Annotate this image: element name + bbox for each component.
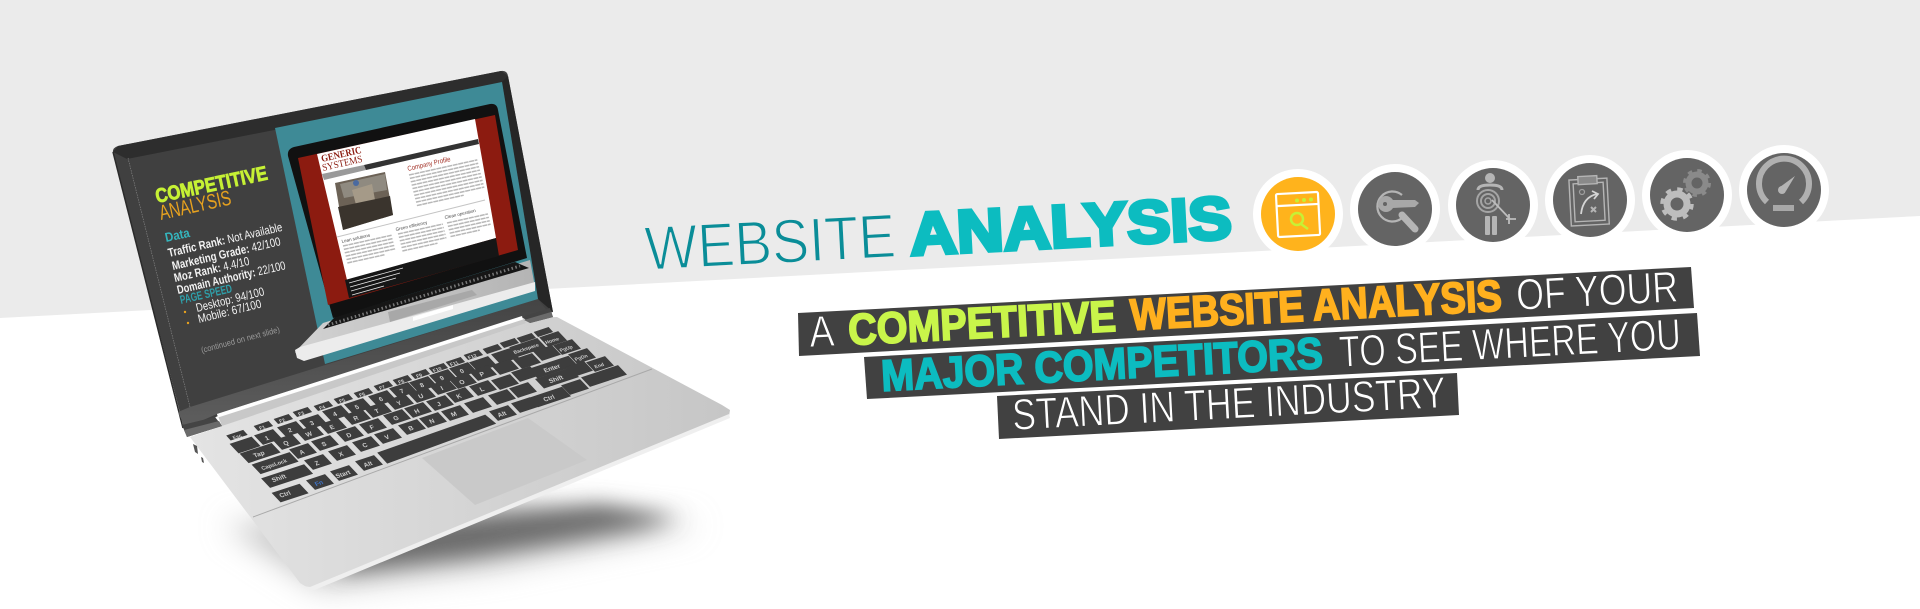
icon: gears xyxy=(1642,150,1732,240)
key labels: Enter xyxy=(543,363,562,374)
background grey band xyxy=(0,0,1920,318)
key labels: Q xyxy=(282,440,290,447)
banner: line 1: OF YOUR xyxy=(1515,263,1679,320)
slide data list: Traffic Rank: Not Available xyxy=(167,220,284,260)
key labels: H xyxy=(413,408,422,415)
mini body copy xyxy=(343,160,491,263)
home key row xyxy=(252,348,596,474)
key labels: Home xyxy=(544,336,561,346)
key labels: PgDn xyxy=(574,354,589,363)
banner: line 3: STAND IN THE INDUSTRY xyxy=(1011,368,1447,440)
slide data list: PAGE SPEED xyxy=(179,281,234,307)
key labels: Ctrl xyxy=(542,394,557,403)
key labels: F10 xyxy=(432,366,443,374)
shift key row xyxy=(261,356,614,488)
key labels: PgUp xyxy=(559,345,574,354)
key labels: Y xyxy=(395,400,404,407)
key labels: E xyxy=(328,424,337,431)
mini website: Company Profile xyxy=(407,156,451,173)
laptop ports xyxy=(193,444,204,463)
key labels: Alt xyxy=(496,410,509,419)
banner: line 1: COMPETITIVE xyxy=(847,292,1117,355)
slide data list xyxy=(164,220,287,355)
icon: speedometer xyxy=(1739,145,1829,235)
key labels: 1 xyxy=(264,435,271,442)
key labels: 5 xyxy=(354,404,361,411)
mini laptop lid xyxy=(288,104,527,318)
key labels: Tap xyxy=(252,450,266,459)
key labels: O xyxy=(458,379,466,386)
number key row xyxy=(230,331,567,453)
slide data list: (continued on next slide) xyxy=(200,324,281,355)
key labels: X xyxy=(337,451,346,458)
key labels: Fn xyxy=(314,479,325,488)
key labels: 6 xyxy=(378,396,385,403)
key labels: J xyxy=(436,401,443,408)
key labels: 7 xyxy=(399,388,406,395)
key labels: Shift xyxy=(271,473,289,484)
title xyxy=(643,184,1233,284)
key labels: G xyxy=(392,415,400,422)
slide data list: Data xyxy=(164,225,192,245)
key labels: R xyxy=(352,415,361,422)
laptop hinges xyxy=(182,308,553,437)
key labels: 8 xyxy=(419,382,426,389)
key labels: C xyxy=(361,442,370,449)
key labels: F12 xyxy=(467,353,478,361)
lid lower bezel xyxy=(178,299,548,428)
icon: browser search xyxy=(1253,169,1343,259)
key labels xyxy=(232,336,605,499)
slide data list: Moz Rank: 4.4/10 xyxy=(173,254,251,285)
mini laptop xyxy=(288,104,535,361)
icon: strategy clipboard xyxy=(1545,155,1635,245)
key labels: Ctrl xyxy=(278,490,293,499)
key labels: V xyxy=(383,434,392,441)
mini photo xyxy=(335,172,393,230)
key labels: N xyxy=(428,418,437,425)
key labels: U xyxy=(417,393,426,400)
key labels: Alt xyxy=(362,460,375,469)
key labels: F6 xyxy=(358,392,367,399)
banner: line 2: MAJOR COMPETITORS xyxy=(880,329,1324,401)
key labels: M xyxy=(450,411,459,419)
title: ANALYSIS xyxy=(908,184,1233,268)
key labels: End xyxy=(594,362,605,370)
QWERTY key row xyxy=(240,339,581,463)
mini logo: GENERIC xyxy=(320,145,363,165)
banner: line 1: A xyxy=(808,307,836,357)
mini website: Clean operation xyxy=(444,208,477,220)
mini website xyxy=(298,115,518,305)
laptop shadow xyxy=(225,505,700,588)
key labels: W xyxy=(305,430,315,439)
key labels: F9 xyxy=(415,373,424,380)
key labels: 4 xyxy=(332,411,339,418)
banner: line 1 xyxy=(798,263,1694,357)
key labels: F7 xyxy=(378,385,387,392)
key labels: Z xyxy=(314,460,321,467)
key labels: T xyxy=(374,408,381,415)
icon: keyword search xyxy=(1350,164,1440,254)
mini website: SYSTEMS xyxy=(321,154,364,174)
slide data list: Marketing Grade: 42/100 xyxy=(171,234,282,273)
key labels: K xyxy=(455,393,464,400)
keyboard xyxy=(226,327,627,502)
mini laptop base xyxy=(295,260,535,361)
mini website: Lean solutions xyxy=(341,232,371,244)
key labels: F xyxy=(369,424,376,431)
bottom key row xyxy=(272,365,627,502)
banner: line 1: WEBSITE ANALYSIS xyxy=(1129,272,1503,340)
key labels: D xyxy=(345,432,354,439)
key labels: F8 xyxy=(397,379,406,386)
trackpad xyxy=(422,418,587,505)
key labels: Shift xyxy=(548,374,566,385)
laptop base xyxy=(190,317,730,591)
slide data list: Mobile: 67/100 xyxy=(196,297,263,326)
key labels: F5 xyxy=(338,398,347,405)
key labels: A xyxy=(298,449,307,456)
key labels: I xyxy=(440,385,445,392)
key labels: S xyxy=(320,441,329,448)
key labels: B xyxy=(407,425,416,432)
key labels: P xyxy=(478,371,487,378)
key labels: F1 xyxy=(258,425,267,432)
key labels: Esc xyxy=(232,433,243,441)
slide heading xyxy=(153,163,270,225)
slide data list: Desktop: 94/100 xyxy=(194,284,266,315)
mini website: Green efficiency xyxy=(395,220,429,232)
slide heading: ANALYSIS xyxy=(157,187,233,225)
key labels: F4 xyxy=(318,405,327,412)
key labels: 9 xyxy=(439,375,446,382)
key labels: 0 xyxy=(459,368,466,375)
key labels: F11 xyxy=(449,360,460,368)
laptop lid xyxy=(113,71,553,432)
slide data list: Domain Authority: 22/100 xyxy=(176,258,287,297)
slide heading: COMPETITIVE xyxy=(153,163,270,208)
key labels: Backspace xyxy=(513,342,541,356)
title: WEBSITE xyxy=(643,202,897,284)
key labels: L xyxy=(479,386,486,393)
function key row xyxy=(226,327,553,440)
key labels: Start xyxy=(334,469,353,480)
key labels: 3 xyxy=(309,420,316,427)
laptop hinge strip xyxy=(217,316,526,426)
key labels: CapsLock xyxy=(261,458,289,472)
banner: line 2 xyxy=(864,310,1700,401)
icon: target person xyxy=(1448,160,1538,250)
banner: line 2: TO SEE WHERE YOU xyxy=(1338,310,1682,377)
key labels: F3 xyxy=(297,411,306,418)
key labels: F2 xyxy=(278,418,287,425)
laptop xyxy=(113,71,730,591)
key labels: 2 xyxy=(287,427,294,434)
screen slide xyxy=(128,82,538,407)
